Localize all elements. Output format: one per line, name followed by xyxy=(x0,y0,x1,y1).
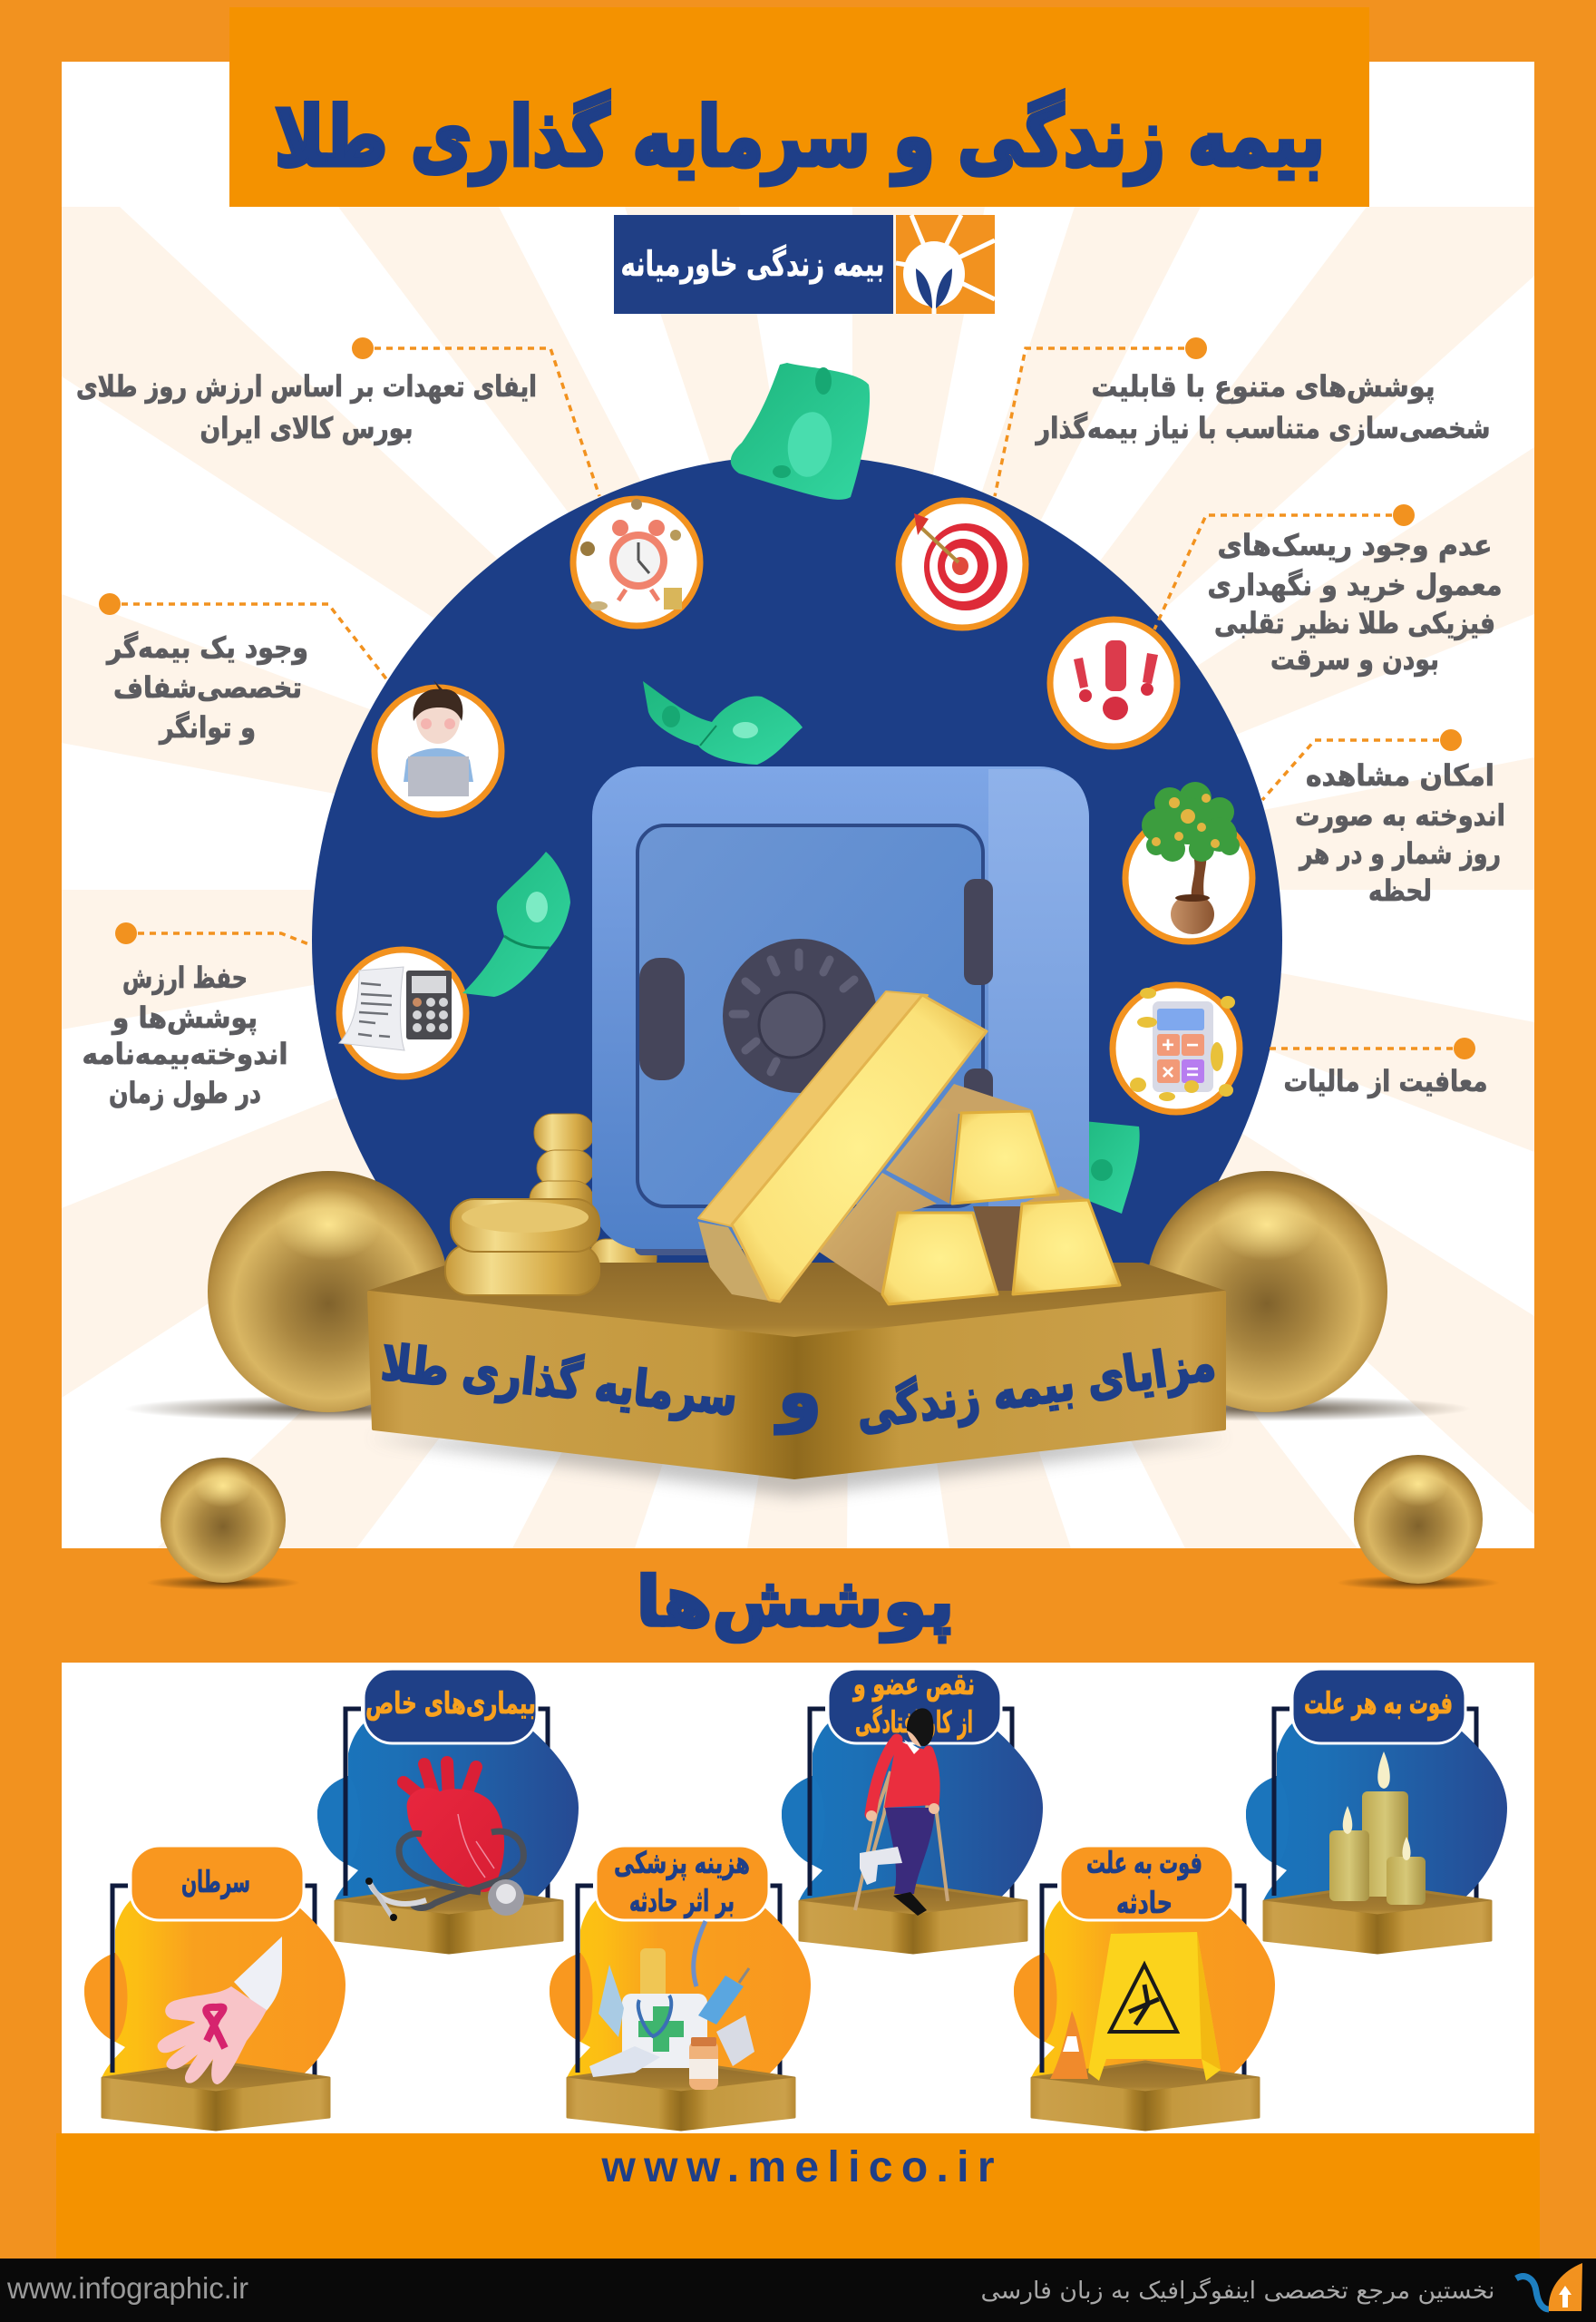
title text: بیمه زندگی و سرمایه گذاری طلا xyxy=(275,90,1325,186)
safe xyxy=(592,766,1089,1255)
label xyxy=(131,1846,304,1920)
label: از کار افتادگی xyxy=(855,1704,973,1740)
benefit text: no risks: بودن و سرقت xyxy=(1270,642,1439,677)
benefit text: diverse coverage xyxy=(1035,369,1491,445)
benefit text: view reserve: روز شمار و در هر xyxy=(1298,836,1501,871)
icon: cone xyxy=(1050,2011,1088,2079)
icon: alarm clock xyxy=(573,499,700,626)
benefit text: gold day value: ایفای تعهدات بر اساس ارزش روز طلای xyxy=(76,369,537,404)
money note: center xyxy=(643,681,803,765)
icon: heart with stethoscope xyxy=(365,1762,524,1921)
website address: www.melico.ir xyxy=(600,2143,994,2191)
icon: first aid kit and medicines xyxy=(589,1921,754,2090)
icon: wet floor sign xyxy=(1088,1932,1221,2081)
benefit text: specialist insurer: و توانگر xyxy=(158,710,256,745)
benefit text: specialist insurer xyxy=(105,630,308,745)
label xyxy=(828,1666,1001,1743)
leader dots xyxy=(99,337,1475,1059)
benefit text: value preservation: پوشش‌ها و xyxy=(111,1000,258,1035)
benefit text: value preservation: اندوخته‌بیمه‌نامه xyxy=(82,1037,288,1071)
benefit text: view reserve: اندوخته به صورت xyxy=(1295,798,1505,833)
label: فوت به هر علت xyxy=(1304,1685,1453,1722)
card: disability xyxy=(782,1666,1043,1953)
big gold spheres xyxy=(124,1171,1471,1421)
label: بر اثر حادثه xyxy=(629,1883,735,1919)
card: medical costs xyxy=(550,1845,811,2130)
pedestal text and: و xyxy=(774,1352,822,1434)
icon: target xyxy=(899,501,1026,628)
small gold sphere right xyxy=(1337,1455,1500,1590)
benefit text: gold day value: بورس کالای ایران xyxy=(200,411,414,445)
footer url: www.infographic.ir xyxy=(6,2271,248,2305)
benefit text: diverse coverage: پوشش‌های متنوع با قابلیت xyxy=(1092,369,1435,404)
icon: person on crutches xyxy=(855,1708,948,1916)
benefit text: no risks: عدم وجود ریسک‌های xyxy=(1217,528,1493,562)
icon: candles xyxy=(1329,1751,1426,1905)
label: حادثه xyxy=(1116,1885,1173,1920)
benefit text: value preservation xyxy=(82,961,288,1110)
benefit text: no risks xyxy=(1208,528,1502,677)
card: special diseases xyxy=(317,1669,579,1953)
label: سرطان xyxy=(181,1864,250,1900)
footer logo xyxy=(1516,2263,1582,2311)
icon: receipt and calculator xyxy=(339,950,466,1077)
lower white panel xyxy=(62,1663,1534,2133)
benefit text: gold day value xyxy=(76,369,537,445)
safe door xyxy=(637,825,983,1206)
icon: person with laptop xyxy=(375,680,501,815)
card: death any cause xyxy=(1246,1669,1507,1953)
card: cancer xyxy=(84,1846,345,2130)
bar: lower left xyxy=(819,1173,998,1304)
benefit text: view reserve: لحظه xyxy=(1368,873,1432,908)
leader lines xyxy=(110,348,1465,1049)
benefit text: no risks: معمول خرید و نگهداری xyxy=(1208,568,1502,602)
label xyxy=(364,1669,537,1743)
benefit text: specialist insurer: تخصصی‌شفاف xyxy=(113,670,302,705)
icon: calculator with coins: − xyxy=(1186,1033,1199,1058)
back coin stack xyxy=(530,1114,657,1275)
pedestal text right: مزایای بیمه زندگی xyxy=(852,1334,1219,1440)
small gold sphere left xyxy=(146,1458,300,1590)
icon: exclamation marks xyxy=(1050,620,1177,746)
top white panel with sun rays xyxy=(62,62,1534,1548)
safe dial xyxy=(723,939,877,1093)
money note: left xyxy=(462,852,570,997)
icon: money tree xyxy=(1125,782,1252,941)
safe door handles xyxy=(639,958,685,1080)
benefit text: diverse coverage: شخصی‌سازی متناسب با نیاز بیمه‌گذار xyxy=(1035,411,1491,445)
bottom orange band xyxy=(56,2133,1540,2259)
label xyxy=(1060,1845,1233,1920)
gold pedestal xyxy=(367,1263,1226,1478)
benefit text: specialist insurer: وجود یک بیمه‌گر xyxy=(105,630,308,665)
big navy circle xyxy=(312,455,1282,1426)
title banner xyxy=(229,7,1369,207)
gold bars xyxy=(698,991,1120,1304)
pedestal shadow xyxy=(367,1438,1230,1497)
front coins xyxy=(445,1199,599,1295)
money note: top xyxy=(731,363,870,500)
pedestal text left: سرمایه گذاری طلا xyxy=(379,1333,740,1427)
benefit text: value preservation: در طول زمان xyxy=(109,1076,261,1110)
coverage heading: پوشش‌ها xyxy=(637,1561,954,1643)
bar: lower right xyxy=(973,1186,1120,1294)
benefit text: view reserve xyxy=(1295,758,1505,908)
label: هزینه پزشکی xyxy=(614,1845,750,1881)
label xyxy=(596,1845,769,1920)
icon: calculator with coins: + xyxy=(1162,1033,1174,1058)
benefit text: value preservation: حفظ ارزش xyxy=(122,961,248,995)
company logo xyxy=(614,215,995,314)
company logo: بیمه زندگی خاورمیانه xyxy=(620,244,885,285)
icon: calculator with coins xyxy=(1113,985,1240,1112)
label: بیماری‌های خاص xyxy=(365,1685,536,1721)
card: accidental death xyxy=(1014,1845,1275,2130)
benefit text: no risks: فیزیکی طلا نظیر تقلبی xyxy=(1214,606,1495,640)
money note: behind safe xyxy=(1070,1121,1140,1214)
label: نقص عضو و xyxy=(852,1666,975,1702)
icon: hand with ribbon xyxy=(158,1937,282,2084)
icon: calculator with coins: × xyxy=(1162,1060,1174,1085)
label: فوت به علت xyxy=(1086,1845,1202,1881)
icon: calculator with coins: = xyxy=(1186,1060,1199,1085)
benefit text: tax exempt: معافیت از مالیات xyxy=(1284,1064,1487,1098)
bar: upper right xyxy=(886,1084,1058,1204)
bar: long diagonal xyxy=(698,991,987,1302)
benefit text: view reserve: امکان مشاهده xyxy=(1306,758,1494,793)
label xyxy=(1292,1669,1465,1743)
footer tagline: نخستین مرجع تخصصی اینفوگرافیک به زبان فارسی xyxy=(981,2277,1494,2305)
footer bar xyxy=(0,2259,1596,2322)
